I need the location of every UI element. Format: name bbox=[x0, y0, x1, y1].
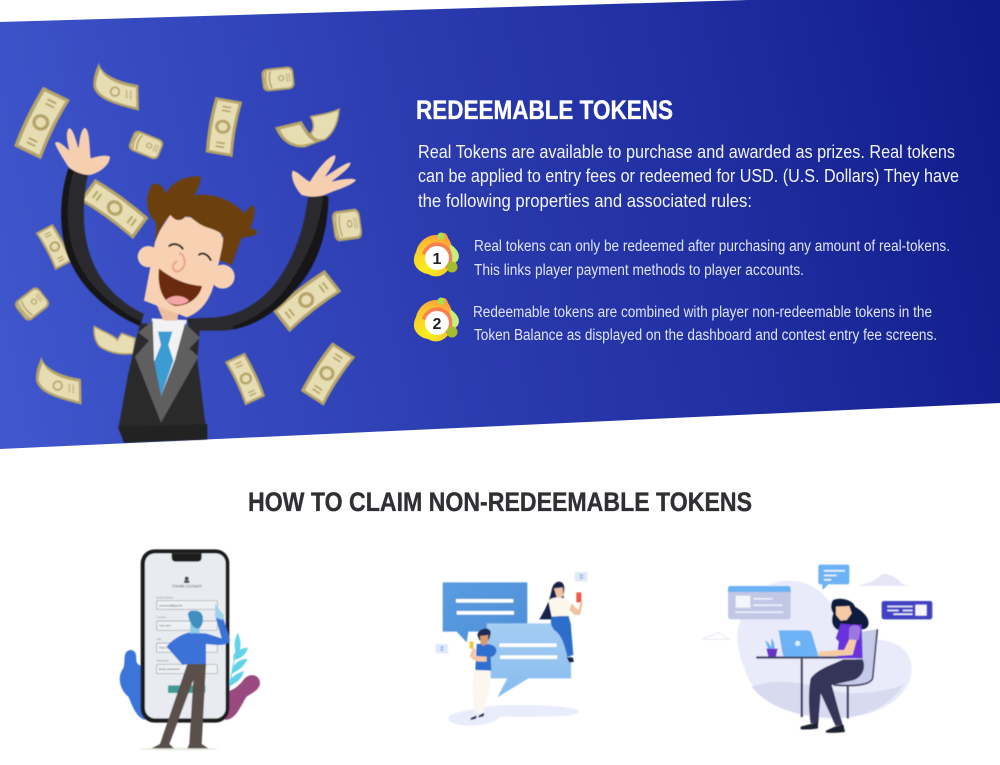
illustration: cheering businessman bbox=[55, 128, 356, 443]
illustration: phone sign-up: Password bbox=[157, 658, 169, 662]
text block: rule 1: This links player payment methods to player accounts. bbox=[474, 262, 804, 279]
icon: number badge 1: 1 bbox=[433, 251, 442, 268]
text block: rule 2 bbox=[473, 304, 937, 344]
illustration: phone sign-up: Your city bbox=[159, 646, 171, 650]
illustration: falling money bills bbox=[13, 63, 363, 406]
illustration: phone sign-up: Create Account bbox=[172, 584, 202, 589]
illustration: woman at laptop bbox=[703, 565, 932, 733]
text block: rule 2: Redeemable tokens are combined with player non-redeemable tokens in the bbox=[473, 304, 932, 321]
illustration: phone sign-up: Country bbox=[157, 615, 167, 619]
text block: rule 1 bbox=[474, 238, 950, 279]
heading: redeemable tokens: REDEEMABLE TOKENS bbox=[416, 95, 673, 125]
illustration: phone sign-up: Email Address bbox=[157, 595, 174, 599]
text block: intro paragraph bbox=[418, 142, 959, 211]
illustration: phone sign-up: Your text bbox=[159, 624, 171, 628]
text block: rule 2: Token Balance as displayed on the dashboard and contest entry fee screens. bbox=[474, 327, 937, 344]
heading: how to claim: HOW TO CLAIM NON-REDEEMABLE TOKENS bbox=[248, 487, 752, 517]
illustration: phone sign-up: youremail@gmail bbox=[159, 603, 182, 607]
text block: intro paragraph: Real Tokens are available to purchase and awarded as prizes. Real tokens bbox=[418, 142, 955, 162]
icon: number badge 2: 2 bbox=[433, 316, 442, 333]
hero banner background bbox=[0, 0, 1000, 449]
illustration: chat conversation bbox=[435, 572, 587, 726]
illustration: phone sign-up: City bbox=[157, 637, 162, 641]
illustration: phone sign-up bbox=[120, 549, 260, 750]
icon: number badge 2 bbox=[414, 298, 459, 341]
text block: intro paragraph: the following properties and associated rules: bbox=[418, 191, 752, 211]
illustration: phone sign-up: Enter password bbox=[159, 667, 180, 671]
icon: number badge 1 bbox=[414, 232, 459, 276]
